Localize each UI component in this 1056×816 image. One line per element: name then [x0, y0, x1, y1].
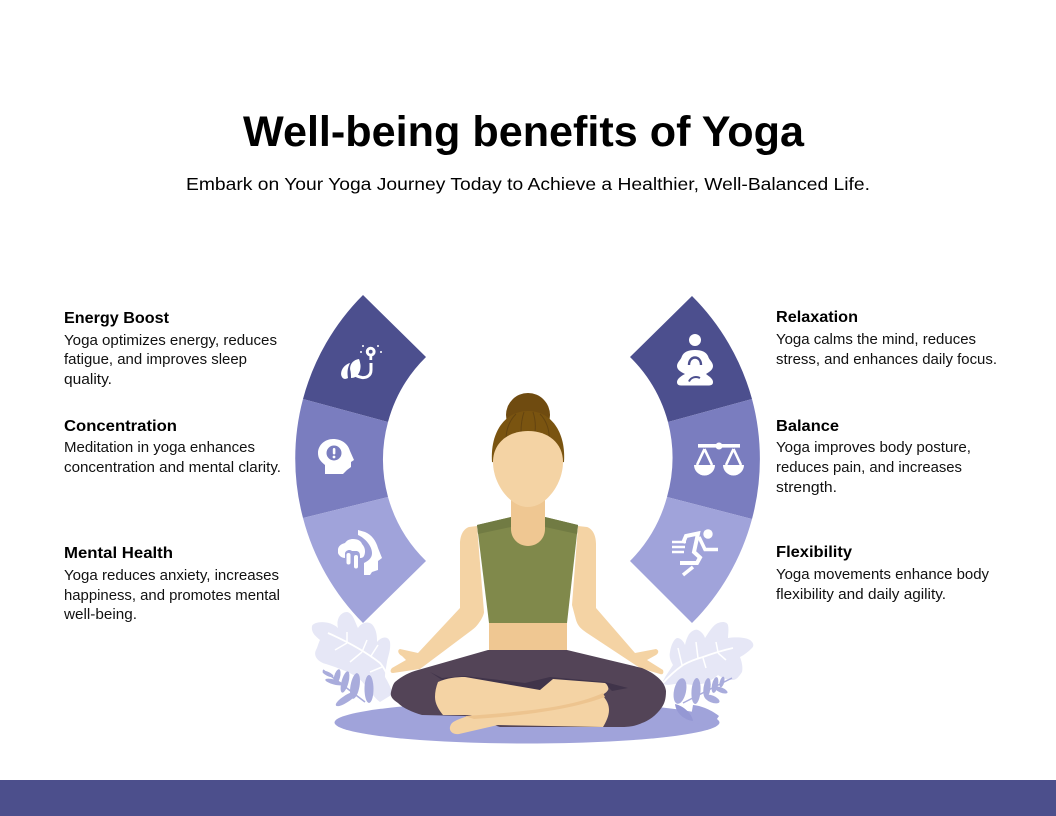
segment: mental health — [303, 497, 426, 623]
panel: left arc — [295, 295, 426, 623]
illustration: right leaves — [663, 622, 753, 705]
text block: Relaxation: stress, and enhances daily focus. — [776, 352, 997, 368]
text block: Concentration: concentration and mental clarity. — [64, 460, 281, 476]
hair bun — [506, 393, 550, 437]
text block: Concentration: Concentration — [64, 418, 177, 435]
text block: Flexibility: Flexibility — [776, 544, 852, 561]
text block: Flexibility: flexibility and daily agility. — [776, 587, 946, 603]
text block: Mental Health: Mental Health — [64, 545, 173, 562]
hair — [492, 411, 564, 470]
illustration: left leaves — [312, 612, 393, 708]
segment: flexibility — [630, 497, 752, 623]
text block: Relaxation: Relaxation — [776, 309, 858, 326]
text block: Energy Boost: Yoga optimizes energy, reduces — [64, 333, 277, 349]
text block: Concentration — [64, 418, 281, 476]
icon: meditating figure — [677, 334, 713, 386]
arms and hands — [391, 526, 663, 674]
text block: Mental Health — [63, 545, 280, 623]
text block: Balance: Yoga improves body posture, — [776, 440, 971, 456]
mat — [334, 702, 720, 744]
text block: Flexibility — [776, 544, 990, 603]
text block: Balance: reduces pain, and increases — [776, 460, 962, 476]
text block: Energy Boost: quality. — [64, 372, 112, 388]
illustration: woman meditating — [391, 393, 666, 734]
icon: running figure — [672, 529, 718, 575]
legs — [391, 650, 666, 727]
text block: Relaxation: Yoga calms the mind, reduces — [776, 332, 976, 348]
icon: balance scales — [694, 442, 744, 476]
text block: Mental Health: well-being. — [63, 607, 137, 623]
icon: leaf and bulb — [341, 345, 382, 379]
subtitle: Embark on Your Yoga Journey Today to Achieve a Healthier, Well-Balanced Life. — [186, 174, 870, 194]
crossed legs — [435, 677, 609, 734]
panel: right arc — [630, 296, 760, 623]
text block: Relaxation — [776, 309, 997, 368]
text block: Balance: strength. — [776, 480, 837, 496]
icon: head with exclamation — [318, 439, 354, 474]
text block: Flexibility: Yoga movements enhance body — [776, 567, 990, 583]
text block: Energy Boost: Energy Boost — [64, 310, 170, 327]
text block: Concentration: Meditation in yoga enhances — [64, 440, 255, 456]
top — [477, 517, 578, 623]
footer bar — [0, 780, 1056, 816]
text block: Mental Health: happiness, and promotes mental — [64, 588, 280, 604]
segment: energy boost — [303, 295, 426, 422]
text block: Mental Health: Yoga reduces anxiety, increases — [64, 568, 279, 584]
text block: Energy Boost — [64, 310, 277, 388]
text block: Balance — [776, 418, 971, 496]
segment: concentration — [295, 399, 388, 518]
face — [493, 431, 563, 507]
text block: Energy Boost: fatigue, and improves sleep — [64, 352, 247, 368]
neck — [511, 495, 545, 546]
torso — [489, 620, 567, 654]
text block: Balance: Balance — [776, 418, 839, 435]
segment: relaxation — [630, 296, 752, 422]
icon: head with rain cloud — [338, 530, 382, 575]
segment: balance — [667, 399, 760, 519]
title: Well-being benefits of Yoga — [243, 108, 805, 156]
